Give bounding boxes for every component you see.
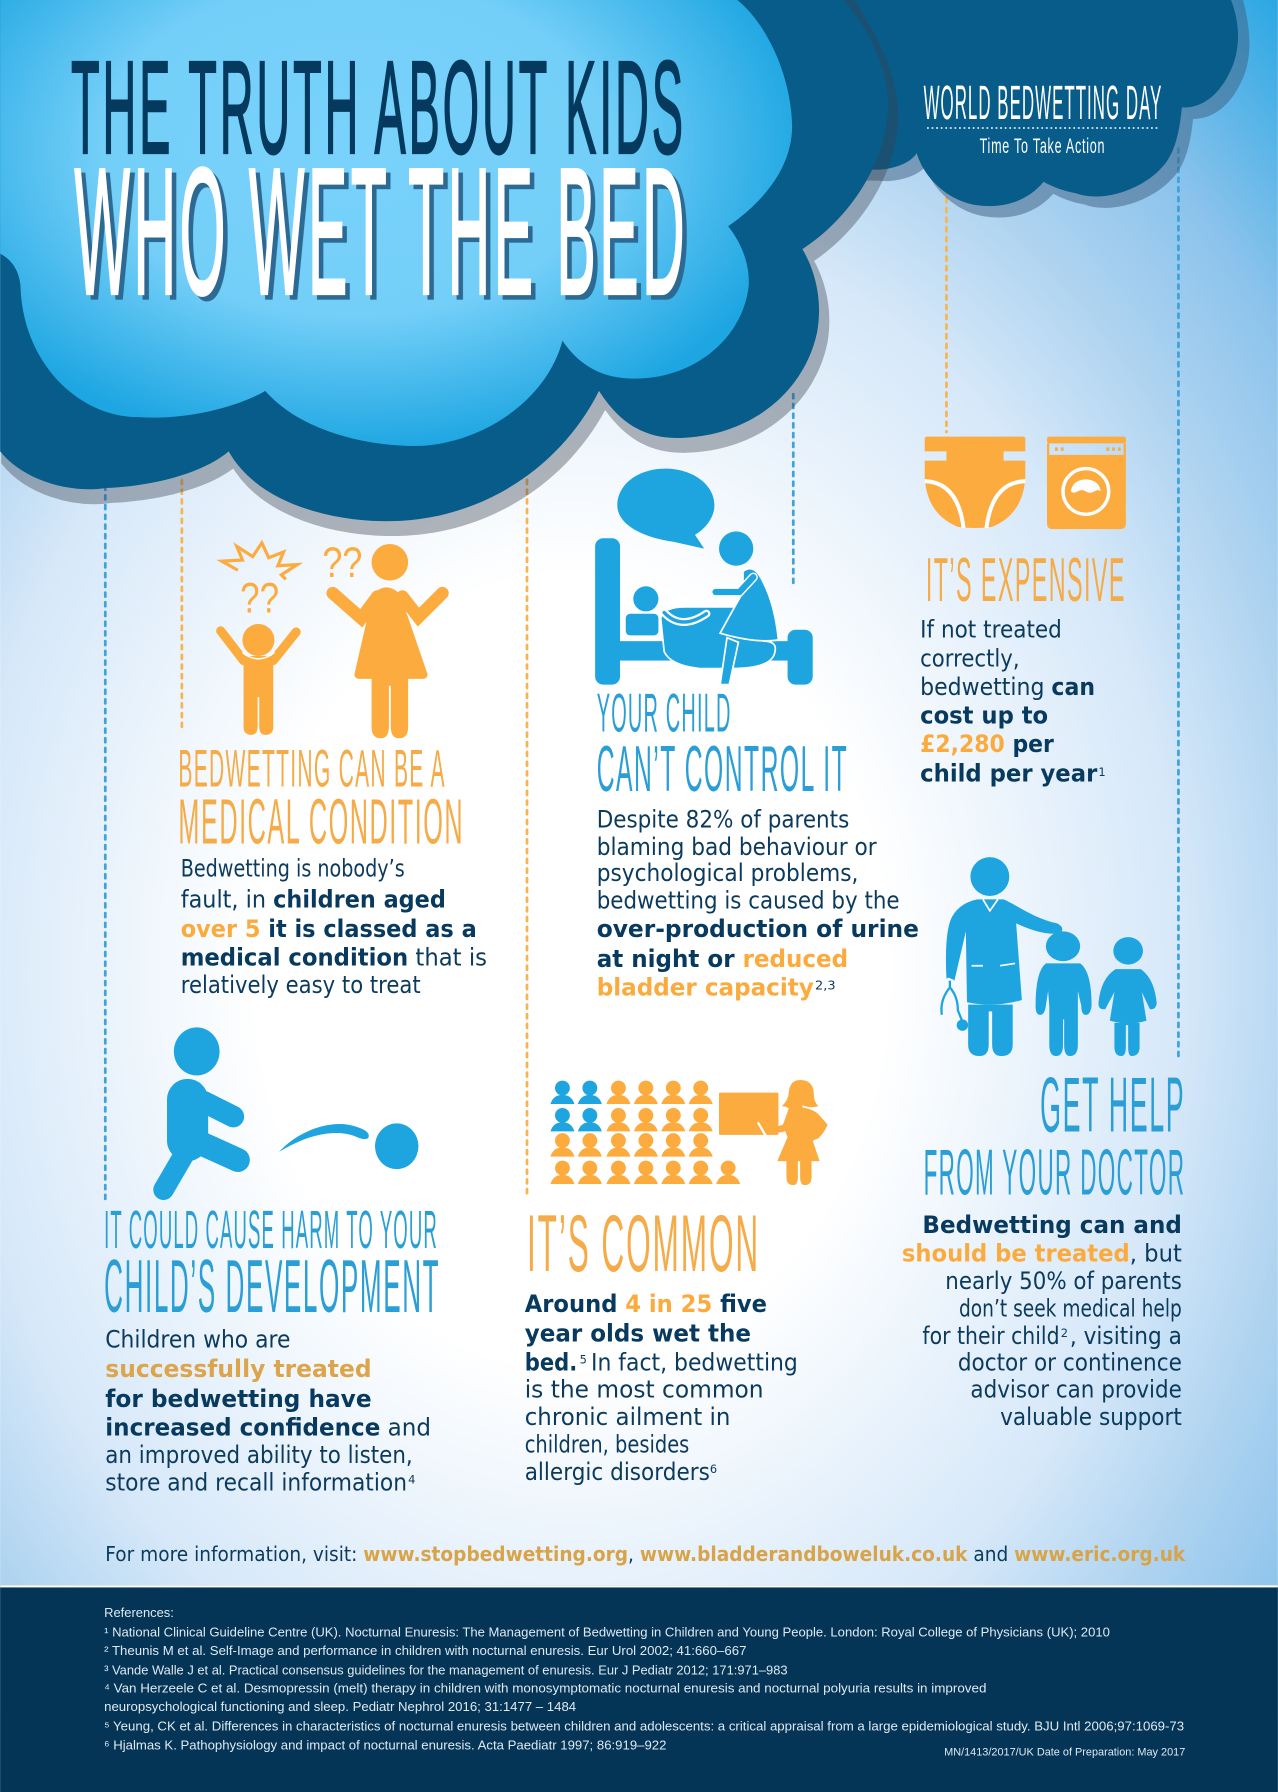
text: development: successfully treated bbox=[105, 1355, 372, 1383]
text: development: for bedwetting have bbox=[105, 1385, 372, 1413]
footer: references: ⁶ Hjalmas K. Pathophysiology and impact of nocturnal enuresis. Acta Paediatr 1997; 86:919–922 bbox=[104, 1738, 666, 1753]
text: cannot control: bladder capacity bbox=[597, 973, 814, 1001]
text: expensive: child per year bbox=[920, 760, 1097, 788]
text: cannot control: psychological problems, bbox=[597, 859, 858, 887]
text: development: an improved ability to listen, bbox=[105, 1441, 413, 1469]
text: get help: Bedwetting can and bbox=[922, 1211, 1182, 1239]
text: expensive: 1 bbox=[1098, 765, 1106, 779]
icon: nappy bbox=[925, 437, 1025, 528]
cloud: world bedwetting day bbox=[800, 0, 1247, 215]
panel: cannot control bbox=[595, 469, 919, 1001]
heading: harm to development bbox=[104, 1200, 440, 1328]
text: get help bbox=[902, 1211, 1182, 1431]
dashed drip lines bbox=[105, 149, 1178, 1200]
text: common: is the most common bbox=[525, 1376, 764, 1404]
text: common: 6 bbox=[710, 1462, 717, 1476]
text: CAN’T CONTROL IT bbox=[597, 732, 848, 805]
panel: medical condition bbox=[178, 539, 487, 999]
text: cannot control: Despite 82% of parents bbox=[597, 805, 849, 833]
icon: confused child and parent: ?? bbox=[240, 575, 279, 622]
text: common: bed. bbox=[525, 1348, 577, 1376]
text: get help: 2 bbox=[1061, 1326, 1068, 1340]
icon: parent at child's bedside bbox=[595, 469, 813, 685]
footer: references: ⁵ Yeung, CK et al. Differences in characteristics of nocturnal enuresis between children and adolescents: a critical appraisal from a large epidemiological study. BJU Intl 2006;97:1069-73 bbox=[104, 1718, 1184, 1733]
text: common: children, besides bbox=[525, 1431, 689, 1459]
text: medical condition: relatively easy to treat bbox=[181, 971, 421, 999]
footer: references: neuropsychological functioning and sleep. Pediatr Nephrol 2016; 31:1477 – 1484 bbox=[104, 1699, 576, 1714]
text: expensive: correctly, bbox=[920, 644, 1020, 672]
panel: expensive bbox=[920, 437, 1126, 788]
text: expensive: cost up to bbox=[920, 701, 1048, 729]
text: development: store and recall information bbox=[105, 1468, 407, 1496]
text: get help: nearly 50% of parents bbox=[945, 1267, 1182, 1295]
heading: your child can't control it: YOUR CHILD bbox=[597, 681, 732, 743]
text: cannot control: blaming bad behaviour or bbox=[597, 833, 877, 861]
tagline: Time To Take Action bbox=[980, 133, 1105, 158]
text: expensive: £2,280 per bbox=[920, 730, 1054, 758]
heading: medical condition bbox=[178, 739, 464, 857]
heading: your child can't control it bbox=[597, 681, 848, 805]
text: common: 5 bbox=[580, 1352, 587, 1366]
text: medical condition: Bedwetting is nobody’s bbox=[181, 855, 405, 883]
footer: references: ² Theunis M et al. Self-Image and performance in children with nocturnal enuresis. Eur Urol 2002; 41:660–667 bbox=[104, 1643, 746, 1658]
more information links: For more information, visit: www.stopbedwetting.org, www.bladderandboweluk.co.uk and www.eric.org.uk bbox=[105, 1542, 1186, 1566]
text: get help: should be treated, but bbox=[902, 1240, 1182, 1268]
text: expensive: If not treated bbox=[920, 616, 1062, 644]
panel: it's common bbox=[525, 1080, 828, 1486]
footer: references: ⁴ Van Herzeele C et al. Desmopressin (melt) therapy in children with monosymptomatic nocturnal enuresis and nocturnal polyuria results in improved bbox=[104, 1681, 986, 1696]
text: cannot control: over-production of urine bbox=[597, 915, 919, 943]
text: expensive: bedwetting can bbox=[920, 673, 1095, 701]
icon: confused child and parent bbox=[221, 539, 442, 738]
text: medical condition: fault, in children aged bbox=[181, 885, 446, 913]
text: common: chronic ailment in bbox=[525, 1403, 730, 1431]
footer: references: ³ Vande Walle J et al. Practical consensus guidelines for the management of enuresis. Eur J Pediatr 2012; 171:971–983 bbox=[104, 1662, 788, 1677]
text: development bbox=[105, 1325, 431, 1496]
text: expensive bbox=[920, 616, 1106, 788]
panel: child's development bbox=[104, 1027, 440, 1496]
text: medical condition: over 5 it is classed as a bbox=[181, 915, 477, 943]
panel: get help from doctor bbox=[902, 857, 1185, 1431]
text: cannot control: 2,3 bbox=[815, 978, 836, 993]
text: get help: doctor or continence bbox=[958, 1348, 1182, 1376]
icon: doctor with two children bbox=[941, 857, 1157, 1056]
text: get help: for their child bbox=[922, 1322, 1060, 1350]
footer: references: References: bbox=[104, 1605, 174, 1620]
heading: get help from your doctor bbox=[924, 1062, 1185, 1208]
icon: washing machine bbox=[1047, 437, 1126, 529]
text: get help: valuable support bbox=[1000, 1403, 1182, 1431]
icon: child kicking ball bbox=[164, 1027, 418, 1190]
text: common bbox=[525, 1290, 798, 1486]
text: MEDICAL CONDITION bbox=[178, 785, 464, 857]
text: medical condition bbox=[181, 855, 487, 999]
main title cloud bbox=[0, 0, 894, 531]
text: IT COULD CAUSE HARM TO YOUR bbox=[104, 1200, 438, 1260]
text: cannot control bbox=[597, 805, 919, 1001]
footer: references: ¹ National Clinical Guideline Centre (UK). Nocturnal Enuresis: The Management of Bedwetting in Children and Young People. London: Royal College of Physicians (UK); 2010 bbox=[104, 1625, 1110, 1640]
text: get help: advisor can provide bbox=[970, 1376, 1182, 1404]
text: development: 4 bbox=[408, 1472, 415, 1486]
text: common: In fact, bedwetting bbox=[591, 1348, 798, 1376]
panel: it's common: IT’S COMMON bbox=[527, 1199, 760, 1289]
text: cannot control: at night or reduced bbox=[597, 945, 848, 973]
text: get help: , visiting a bbox=[1070, 1322, 1182, 1350]
text: get help: don’t seek medical help bbox=[959, 1295, 1182, 1323]
footer: references bbox=[0, 1585, 1278, 1792]
icon: confused child and parent: ?? bbox=[322, 539, 362, 586]
text: BEDWETTING CAN BE A bbox=[178, 739, 446, 798]
icon: classroom of pupils and teacher bbox=[550, 1080, 828, 1185]
text: development: increased confidence and bbox=[105, 1413, 431, 1441]
text: cannot control: bedwetting is caused by the bbox=[597, 887, 900, 915]
text: CHILD’S DEVELOPMENT bbox=[104, 1244, 440, 1328]
text: development: Children who are bbox=[105, 1325, 290, 1353]
text: common: year olds wet the bbox=[525, 1320, 751, 1348]
text: common: allergic disorders bbox=[525, 1458, 710, 1486]
text: medical condition: medical condition that is bbox=[181, 944, 487, 972]
document reference: MN/1413/2017/UK Date of Preparation: May 2017 bbox=[944, 1746, 1185, 1758]
text: common: Around 4 in 25 five bbox=[525, 1290, 767, 1318]
